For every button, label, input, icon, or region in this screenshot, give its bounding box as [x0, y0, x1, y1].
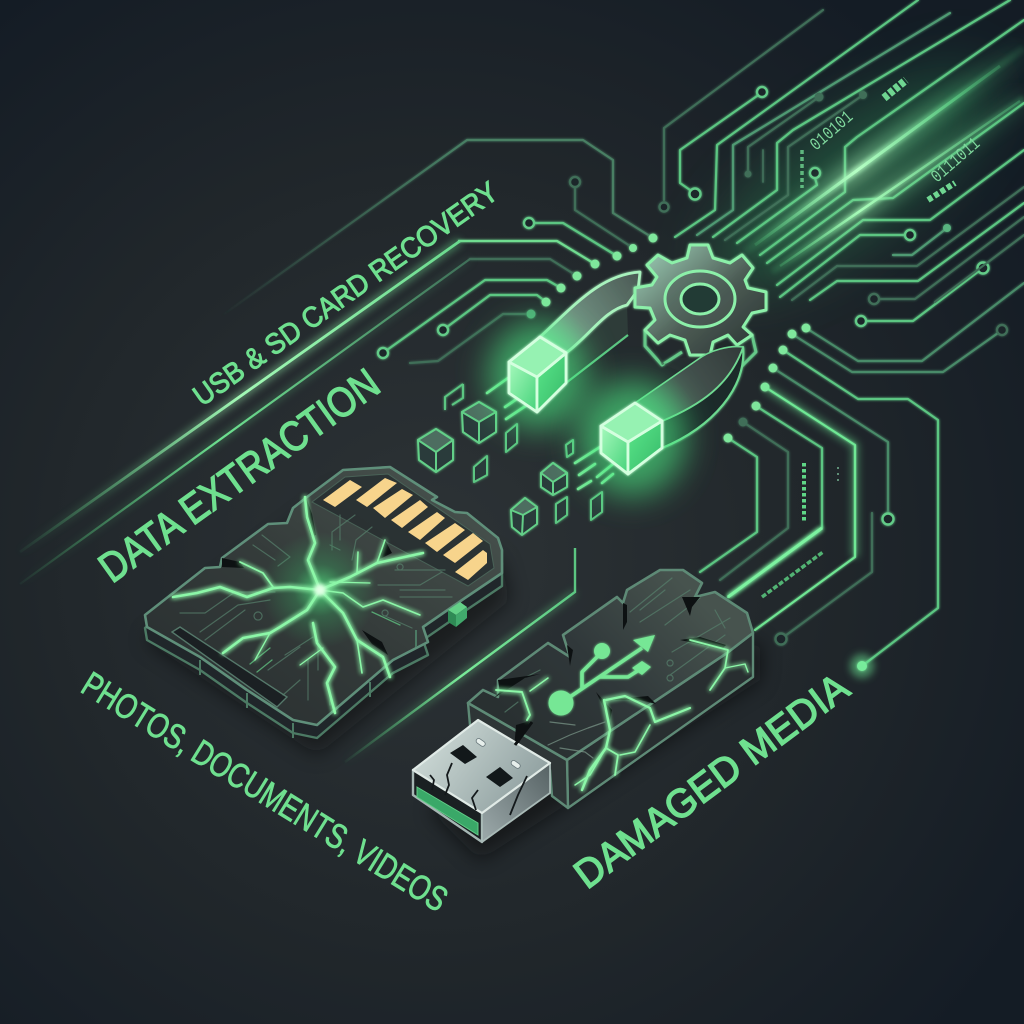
groove — [172, 627, 287, 707]
bright diagonal trace near usb — [728, 528, 822, 597]
dark fractures — [222, 497, 392, 655]
circuit traces: upper left — [220, 140, 658, 363]
heading: data extraction: DATA EXTRACTION — [90, 359, 388, 591]
magnet pole glow — [488, 321, 588, 429]
side notches — [200, 630, 416, 738]
gear — [635, 245, 766, 355]
usb shadow — [430, 640, 760, 860]
top right glow — [680, 36, 1020, 324]
magnet arm one — [540, 272, 640, 353]
usb symbol — [548, 635, 655, 716]
data fragments — [418, 378, 613, 535]
sheet fragments — [445, 384, 602, 523]
usb fine surface cracks — [548, 722, 605, 758]
usb side face — [567, 633, 753, 808]
usb connector — [413, 720, 550, 842]
binary text one: 010101 — [807, 108, 858, 156]
circuit traces: lower right — [700, 324, 938, 671]
magnet arm one underside — [566, 305, 628, 383]
crack center — [314, 584, 326, 596]
usb dark fractures — [494, 597, 726, 750]
long diagonal line one — [20, 241, 460, 552]
magnet arm one lower line — [566, 335, 628, 383]
cube fragments — [418, 402, 567, 535]
long diagonal line two — [20, 259, 470, 584]
usb front face — [468, 703, 568, 808]
connector holes — [450, 745, 477, 764]
gold contacts — [323, 478, 487, 580]
sd card — [145, 467, 510, 755]
cracks — [173, 497, 423, 713]
small vertical dots — [837, 467, 839, 484]
magnet arm two underside — [662, 347, 743, 448]
magnet arm two — [635, 347, 743, 421]
usb cracks — [496, 640, 748, 790]
magnet pole one — [509, 337, 566, 412]
usb drive — [413, 570, 760, 860]
binary text two: 0111011 — [928, 134, 985, 188]
connector cracks — [430, 763, 527, 815]
light beams top right — [745, 48, 1024, 272]
connector tongue — [417, 787, 478, 835]
usb circuit traces — [505, 578, 730, 712]
crack glow — [262, 532, 378, 648]
card side thickness — [145, 480, 502, 738]
diagonal data stream — [762, 552, 823, 597]
magnet pole two — [601, 403, 662, 474]
vertical dotted data — [802, 463, 806, 523]
card top face — [145, 467, 502, 725]
endpoint glow — [850, 654, 874, 678]
card circuit traces — [180, 515, 452, 705]
bright bend trace glow — [765, 387, 855, 557]
card shadow — [145, 490, 510, 755]
green tab — [448, 602, 467, 627]
motion dashes — [487, 378, 613, 489]
connector top — [413, 720, 550, 813]
gear side shading — [645, 330, 752, 380]
caption: photos documents videos: PHOTOS, DOCUMENTS, VIDEOS — [75, 665, 454, 920]
contact recess — [312, 474, 494, 586]
data blocks two — [928, 183, 955, 200]
data blocks three — [800, 150, 804, 188]
usb top face — [468, 570, 753, 760]
top connector crack — [515, 722, 532, 745]
connector right side — [482, 763, 550, 842]
long diagonal line three — [345, 548, 575, 762]
connector front — [413, 770, 482, 842]
magnet pole glow two — [578, 380, 686, 496]
data blocks one — [884, 80, 906, 98]
magnet and gear — [540, 245, 766, 448]
gear lower body — [645, 330, 756, 366]
heading: damaged media: DAMAGED MEDIA — [566, 665, 858, 897]
circuit traces: top right — [660, 0, 1024, 372]
heading: usb and sd card recovery: USB & SD CARD RECOVERY — [188, 176, 504, 413]
